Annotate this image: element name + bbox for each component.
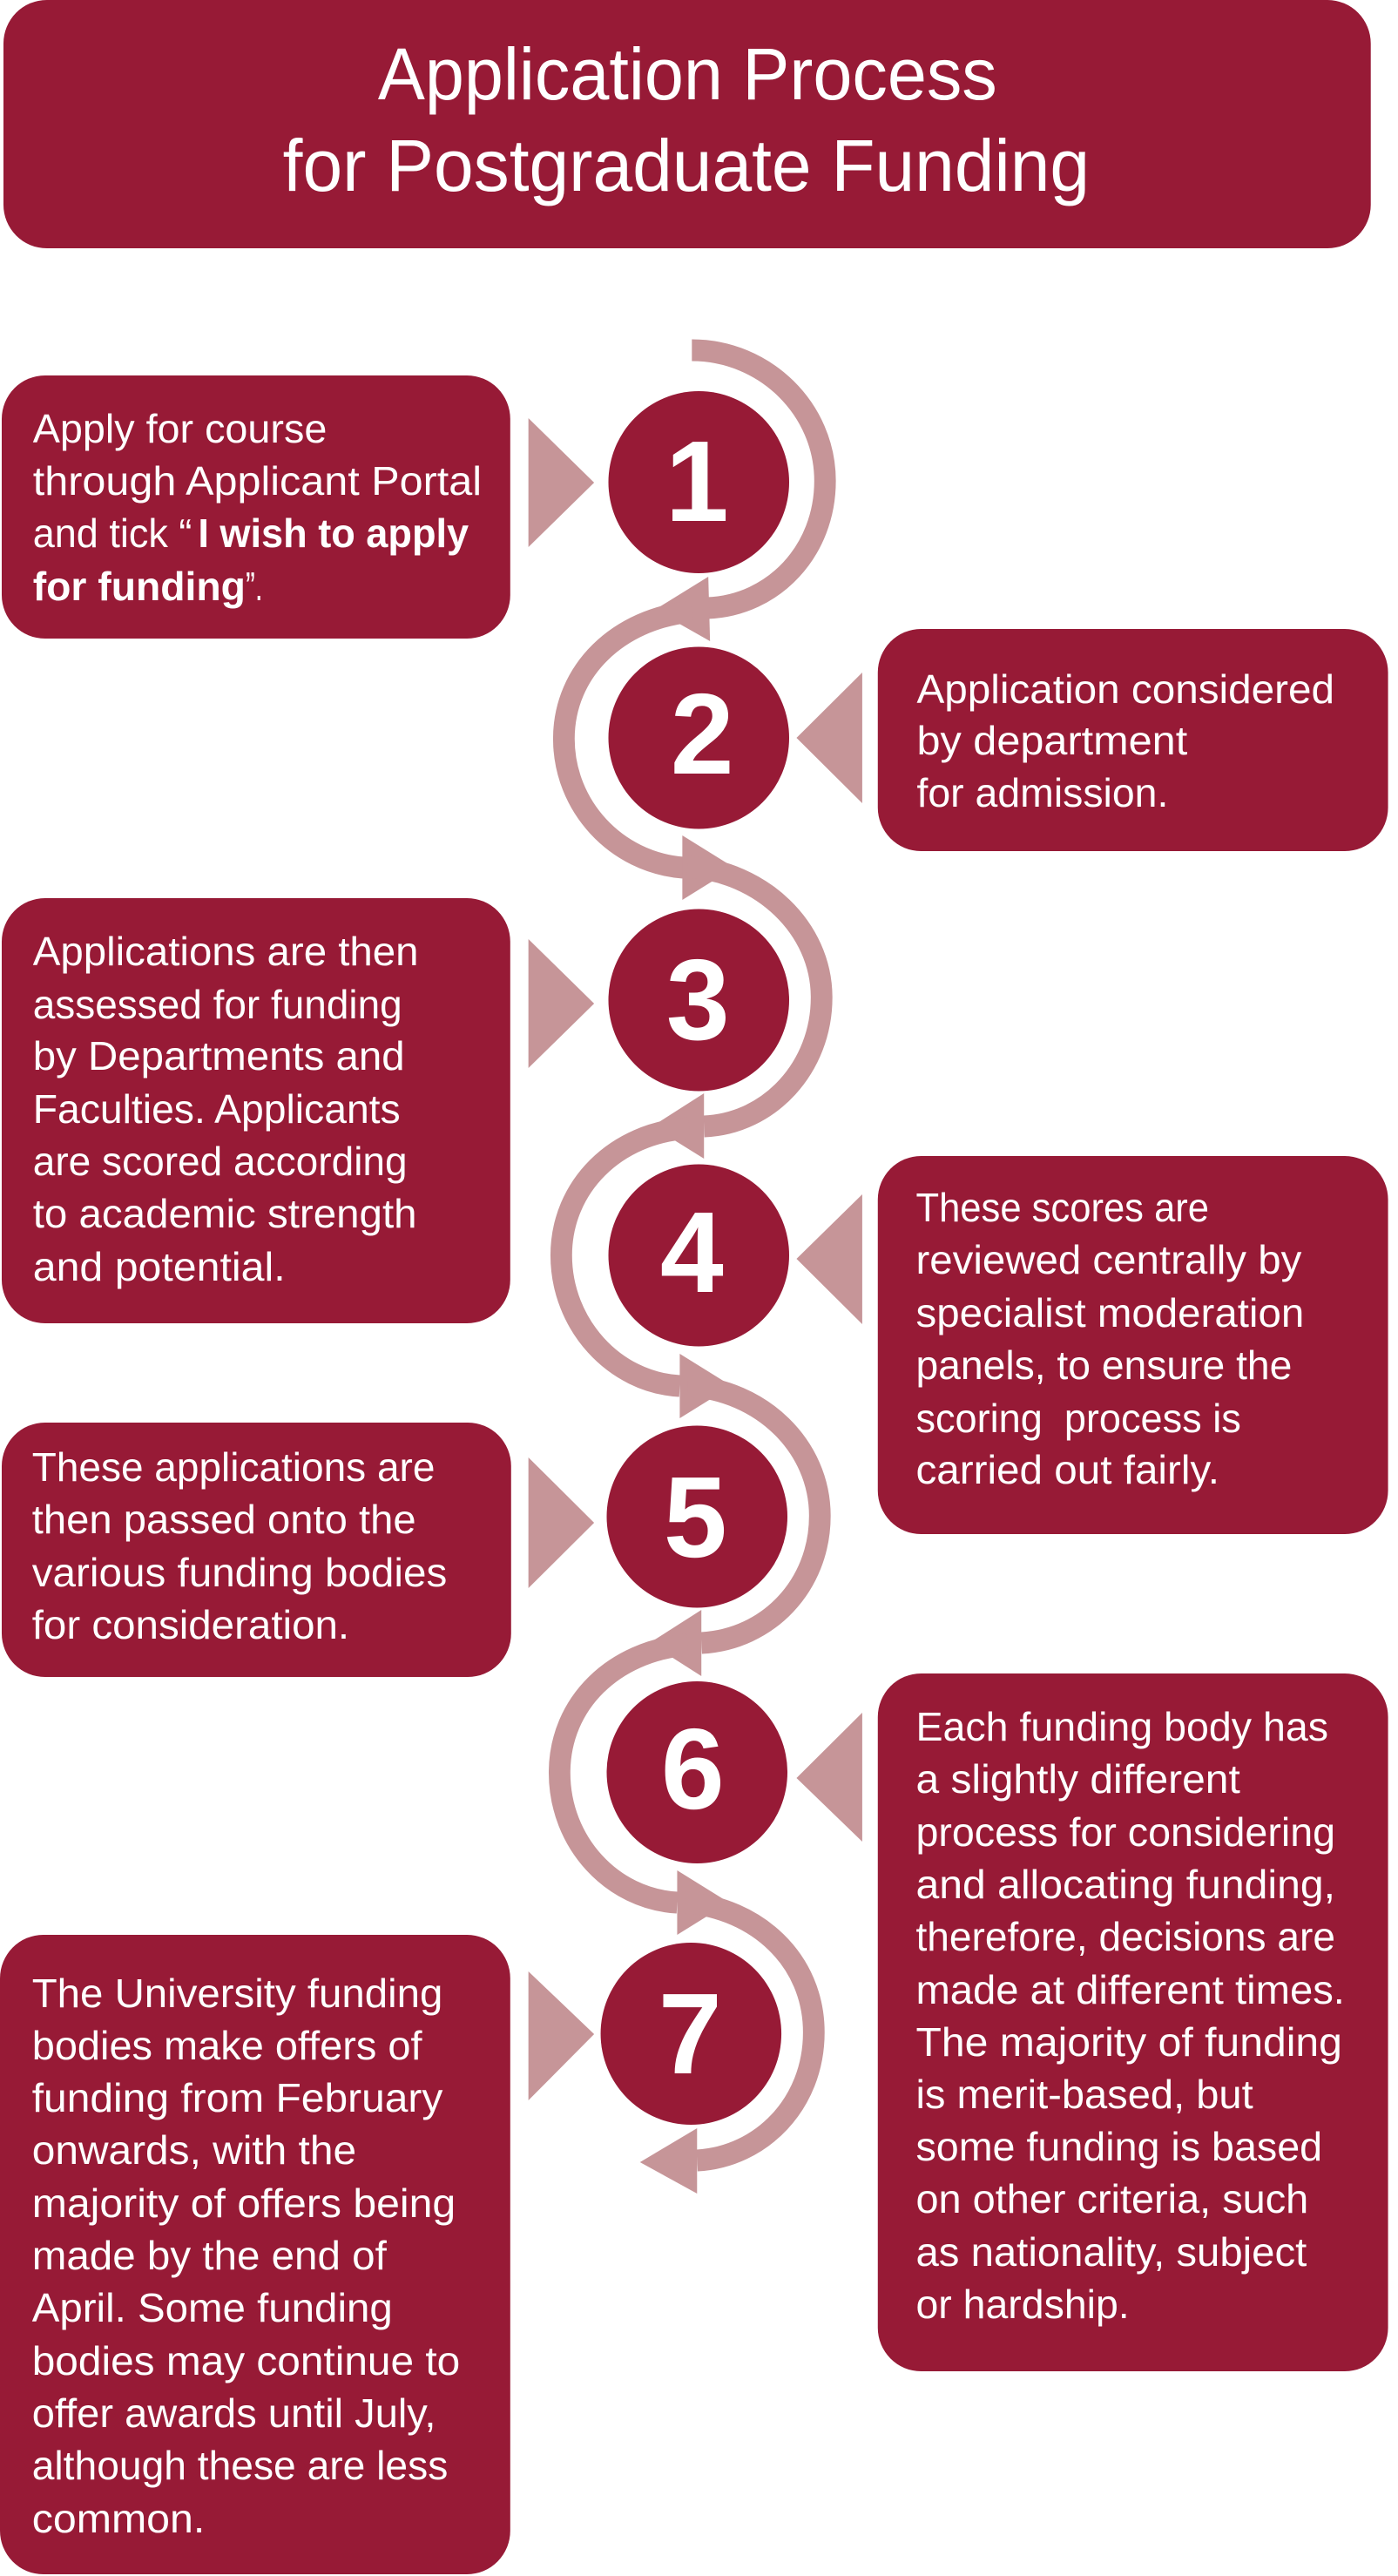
step 5 text: for consideration.: [32, 1603, 349, 1647]
step 6 text: and allocating funding,: [915, 1863, 1335, 1907]
step 3 text: to academic strength: [33, 1192, 417, 1236]
title banner: [3, 0, 1371, 248]
step 5 text: then passed onto the: [32, 1498, 416, 1542]
step 1 number circle: 1: [665, 417, 729, 545]
step 5 text: These applications are: [32, 1445, 435, 1490]
step 1 number circle: [608, 391, 789, 573]
spiral arrow: step 4 to step 5: [650, 1386, 820, 1676]
step 4 number circle: 4: [660, 1188, 724, 1316]
step 2 text: for admission.: [916, 771, 1168, 815]
step 7 text: although these are less: [32, 2444, 448, 2488]
step 1 text: I wish to apply: [198, 511, 469, 556]
pointer: step 5: [529, 1457, 594, 1588]
step 3 text: [33, 930, 419, 1289]
step 3 text: by Departments and: [33, 1034, 405, 1078]
step 3 number circle: [608, 909, 789, 1091]
step 1 text: through Applicant Portal: [33, 459, 482, 504]
step 7 text: offer awards until July,: [32, 2391, 436, 2436]
step 7 text: bodies may continue to: [32, 2339, 460, 2383]
step 4 panel: [878, 1156, 1388, 1534]
step 7 number circle: 7: [658, 1970, 722, 2098]
step 7 text: common.: [32, 2497, 205, 2541]
pointer: step 7: [529, 1971, 594, 2100]
step 7 text: funding from February: [32, 2076, 442, 2120]
step 7 text: bodies make offers of: [32, 2024, 422, 2068]
step 2 number circle: [608, 646, 789, 829]
step 7 text: onwards, with the: [32, 2128, 356, 2173]
step 7 text: [32, 1971, 460, 2541]
step 4 text: reviewed centrally by: [915, 1238, 1301, 1282]
step 1 text: [33, 407, 482, 609]
step 3 text: are scored according: [33, 1139, 408, 1184]
step 5 text: [32, 1445, 447, 1647]
step 4 text: panels, to ensure the: [915, 1343, 1292, 1388]
step 1 text: Apply for course: [33, 407, 327, 451]
step 6 text: a slightly different: [915, 1757, 1240, 1802]
step 7 text: majority of offers being: [32, 2181, 456, 2226]
spiral arrow: step 3 to step 4: [561, 1128, 732, 1418]
title text: Application Process: [378, 33, 997, 115]
pointer: step 2: [796, 673, 862, 803]
step 6 number circle: 6: [661, 1705, 725, 1833]
step 6 text: The majority of funding: [915, 2020, 1342, 2065]
step 2 panel: [878, 629, 1388, 851]
step 7 number circle: [601, 1943, 781, 2125]
step 4 text: specialist moderation: [915, 1291, 1304, 1335]
step 5 text: various funding bodies: [32, 1551, 447, 1595]
step 1 text: ”.: [246, 565, 263, 609]
step 6 number circle: [607, 1681, 787, 1863]
step 6 text: process for considering: [915, 1810, 1335, 1855]
pointer: step 6: [796, 1713, 862, 1842]
step 6 text: therefore, decisions are: [915, 1915, 1335, 1959]
step 6 text: [915, 1705, 1345, 2327]
step 6 text: as nationality, subject: [915, 2230, 1307, 2275]
step 2 text: by department: [916, 719, 1188, 763]
step 4 number circle: [608, 1164, 789, 1347]
title text: for Postgraduate Funding: [283, 125, 1090, 206]
step 6 text: some funding is based: [915, 2125, 1322, 2169]
spiral arrow: start to step 1: [655, 350, 825, 641]
step 2 text: Application considered: [916, 667, 1334, 712]
step 3 text: Faculties. Applicants: [33, 1087, 401, 1132]
step 4 text: [915, 1186, 1304, 1492]
spiral arrow: step 5 to step 6: [559, 1645, 729, 1935]
step 6 text: Each funding body has: [915, 1705, 1328, 1749]
spiral arrow: step 1 to step 2: [564, 612, 734, 900]
step 4 text: carried out fairly.: [915, 1448, 1219, 1492]
step 6 text: made at different times.: [915, 1968, 1345, 2012]
pointer: step 4: [796, 1194, 862, 1324]
step 3 text: and potential.: [33, 1245, 286, 1289]
step 3 panel: [2, 898, 510, 1323]
step 5 number circle: [607, 1425, 787, 1608]
step 7 panel: [0, 1935, 510, 2574]
step 7 text: April. Some funding: [32, 2286, 393, 2330]
step 6 text: or hardship.: [915, 2282, 1130, 2327]
step 3 text: Applications are then: [33, 930, 419, 974]
step 1 text: and tick “: [33, 511, 192, 556]
step 5 number circle: 5: [664, 1453, 727, 1581]
step 6 text: on other criteria, such: [915, 2177, 1308, 2221]
step 4 text: These scores are: [915, 1186, 1209, 1230]
step 1 panel: [2, 375, 510, 639]
spiral arrow: step 2 to step 3: [652, 867, 821, 1159]
pointer: step 1: [529, 418, 594, 547]
step 4 text: scoring process is: [915, 1396, 1241, 1441]
pointer: step 3: [529, 939, 594, 1068]
spiral arrow: step 6 to step 7 and exit: [640, 1903, 814, 2194]
step 7 text: The University funding: [32, 1971, 442, 2016]
step 2 number circle: 2: [671, 670, 734, 798]
step 2 text: [916, 667, 1334, 815]
step 6 text: is merit-based, but: [915, 2072, 1253, 2117]
step 6 panel: [878, 1673, 1388, 2371]
step 7 text: made by the end of: [32, 2234, 387, 2278]
step 3 text: assessed for funding: [33, 983, 402, 1027]
step 3 number circle: 3: [666, 936, 730, 1064]
step 5 panel: [2, 1423, 511, 1677]
title text: [283, 33, 1090, 206]
step 1 text: for funding: [33, 565, 246, 609]
